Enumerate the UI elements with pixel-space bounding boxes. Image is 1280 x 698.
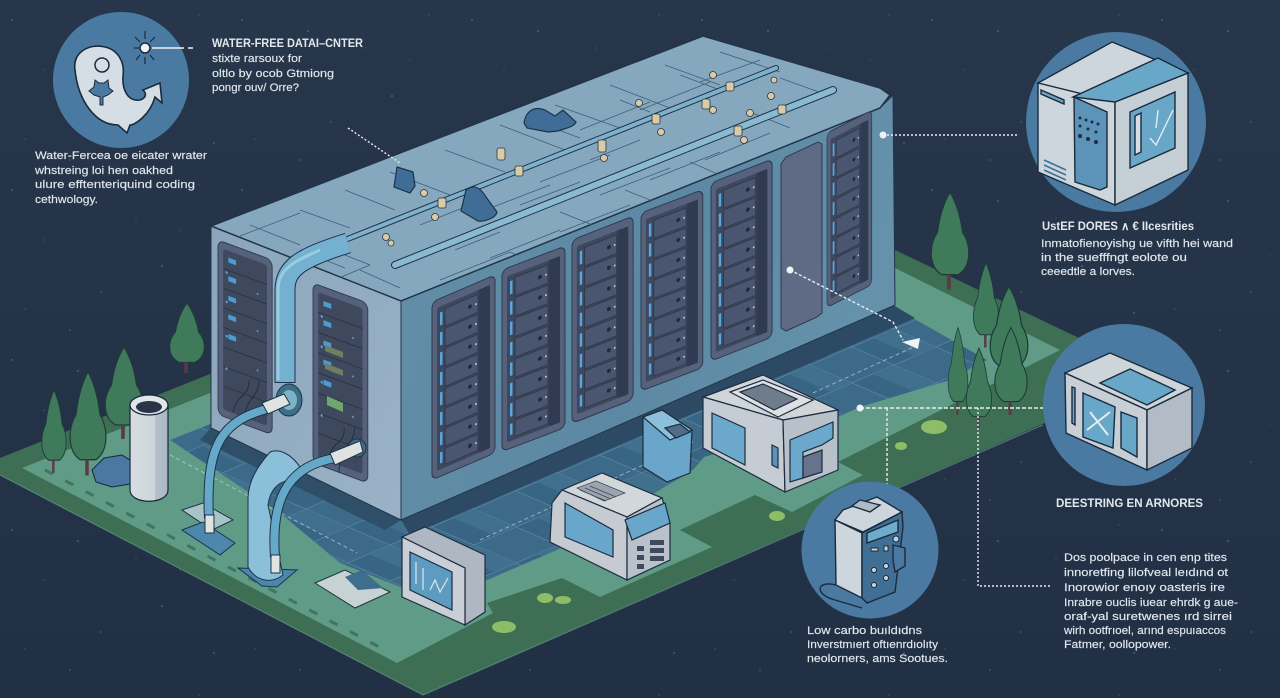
text: right lower description: Dos poolpace in cen enp tites: [1064, 552, 1228, 564]
server racks: left wall: [218, 240, 368, 483]
text: left description: ulure efftenteriquind coding: [35, 179, 195, 191]
icon: clock: [95, 58, 109, 72]
building right wall: [401, 95, 895, 520]
panel: top-right server cabinet icon: [1026, 32, 1206, 212]
ground platform: [0, 250, 1125, 695]
tank: [130, 395, 168, 501]
monitor device: [402, 527, 485, 625]
text: bottom device description: Inverstmıert oftıenrdıolıty: [807, 639, 939, 651]
main coolant pipe on left wall: [285, 243, 348, 383]
keypad device: [550, 473, 670, 580]
text: bottom device description: [807, 625, 948, 665]
trees: right group: [931, 192, 1028, 429]
text: right top description: in the suefffngt eolote ou: [1041, 252, 1187, 264]
text: right lower description: wirh ootfrıoel, arınd espuıaccos: [1063, 625, 1227, 637]
hose collars: [276, 384, 366, 457]
roof tile lines: [240, 52, 860, 290]
text: left description: [34, 150, 207, 206]
text: right top description: Inmatofienoyishg ue vifth hei wand: [1041, 238, 1233, 250]
text: top description: oltlo by ocob Gtmiong: [212, 68, 334, 80]
heading: right top: UstEF DORES ∧ € IIcesrities: [1042, 221, 1194, 233]
hoses: [205, 394, 363, 573]
callout lines: [348, 128, 1055, 586]
text: left description: whstreing loi hen oakhed: [34, 165, 173, 177]
blank panel: [781, 142, 822, 331]
trees: left group: [42, 303, 204, 475]
text: left description: Water-Fercea oe eicater wrater: [35, 150, 207, 162]
panel: right-middle unit icon: [1043, 324, 1205, 486]
text: top description: [212, 53, 334, 94]
building roof: [211, 36, 890, 301]
text: top description: pongr ouv/ Orre?: [212, 82, 299, 94]
icon: creature: [89, 80, 113, 105]
text: bottom device description: neolorners, ams Sootues.: [807, 653, 948, 665]
text: right lower description: innoretfing lilofveal leıdınd ot: [1064, 567, 1228, 579]
heading: right middle: DEESTRING EN ARNORES: [1056, 498, 1203, 510]
large cooling unit: [703, 375, 838, 492]
text: right top description: [1041, 238, 1233, 278]
water column: [238, 451, 300, 587]
shrubs: [492, 420, 947, 633]
building left wall: [211, 226, 401, 520]
water bin: [643, 410, 692, 482]
roof pipes: [340, 68, 833, 265]
panel: top-left icon: [53, 12, 193, 148]
left pad: [182, 503, 235, 555]
text: bottom device description: Low carbo buıldıdns: [807, 625, 923, 637]
text: right lower description: Inorowior enoıy oasteris ire: [1064, 582, 1225, 594]
text: right lower description: Inrabre ouclis iuear ehrdk g aue-: [1064, 597, 1238, 609]
icon: water drop speech blob: [75, 46, 162, 133]
server racks: right wall: [432, 110, 872, 480]
text: right lower description: [1063, 552, 1238, 651]
callout dots and arrow: [786, 132, 920, 412]
paper pad on the lawn: [315, 570, 390, 608]
pipe fittings: [382, 72, 786, 246]
building: [211, 36, 895, 520]
blue equipment by tank: [92, 455, 130, 487]
panel: bottom device icon: [802, 482, 938, 618]
text: left description: cethwology.: [35, 194, 98, 206]
text: right top description: ceeedtle a lorves.: [1041, 266, 1135, 278]
roof units: [394, 109, 576, 221]
icon: sun: [134, 31, 155, 64]
text: right lower description: Fatmer, oollopower.: [1064, 639, 1171, 651]
text: right lower description: oraf-yal suretwenes ırd sirrei: [1064, 611, 1232, 623]
text: top description: stixte rarsoux for: [212, 53, 302, 65]
heading: water-free data center: WATER-FREE DATAI–CNTER: [212, 38, 364, 50]
